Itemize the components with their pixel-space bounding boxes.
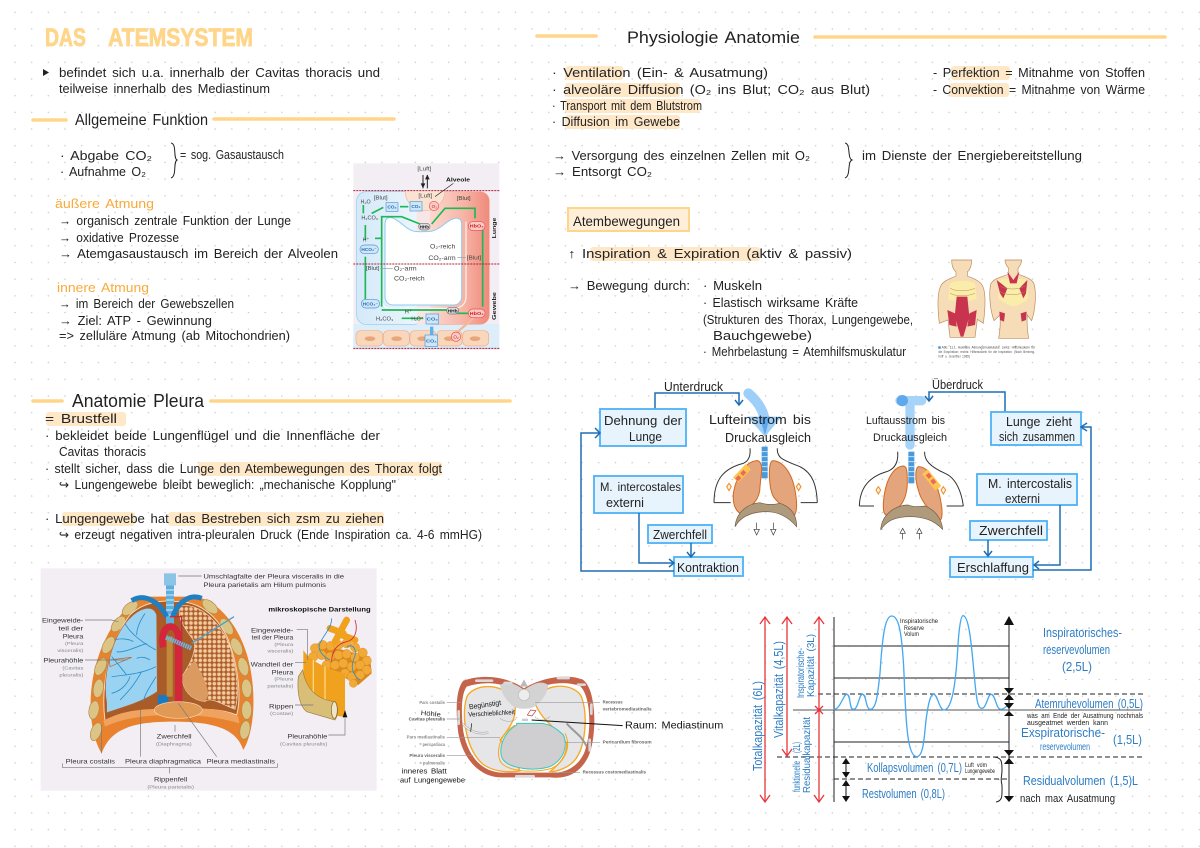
text: Luftausstrom: Luftausstrom bis: [866, 415, 945, 427]
labels: Pleura: [63, 634, 84, 641]
box: Lunge zieht sich zusammen: Lunge zieht: [1006, 415, 1073, 429]
diagram: alveolar gas exchange: HHb: [420, 224, 429, 229]
diagram: alveolar gas exchange: CO₂-reich: [394, 277, 425, 283]
labels: visceralis): [57, 648, 84, 653]
label: Exspiratorisches Reservevolumen: [1021, 726, 1142, 753]
arrows: feedback loop: [984, 423, 1091, 570]
labels: Wandteil der: [251, 662, 294, 669]
volume curve: [834, 616, 1009, 757]
labels: Pericardium fibrosum: [603, 740, 652, 745]
text block: Pleura description: [45, 412, 482, 542]
labels: inneres Blatt: [402, 766, 447, 775]
text block: Physiologie list: · alveoläre Diffusion (O₂ ins Blut; CO₂ aus Blut): [552, 83, 870, 97]
diagram: alveolar gas exchange: CO₂-arm: [428, 256, 456, 262]
box: Zwerchfell: Zwerchfell: [653, 528, 707, 542]
text block: Bewegung: Bauchgewebe): [713, 329, 812, 343]
labels: Höhle: [420, 710, 441, 719]
labels: (Costae): [270, 711, 294, 716]
text block: Pleura description: · stellt sicher, dass die Lunge den Atembewegungen des Thorax folgt: [45, 462, 443, 476]
labels: Rippen: [269, 703, 294, 710]
diagram: alveolar gas exchange: [Blut]: [457, 196, 471, 202]
labels: Begünstigt: [468, 698, 502, 711]
label: Inspiratorisches Reservevolumen: (2,5L): [1062, 660, 1092, 674]
label: Kollapsvolumen: Lungengewebe: [965, 769, 995, 775]
chart: lung volumes: [751, 616, 1145, 805]
text block: Bewegung: [568, 247, 913, 359]
labels: Rippenfell: [154, 777, 188, 784]
diagram: alveolar gas exchange: H₂CO₃: [361, 215, 378, 221]
box: Kontraktion: Kontraktion: [677, 561, 739, 575]
diagram: alveolar gas exchange: HbO₂: [470, 224, 484, 229]
label: Atemruhevolumen: Atemruhevolumen (0,5L): [1035, 697, 1143, 711]
labels: Pleura visceralis: [409, 753, 446, 758]
text block: äußere Atmung: → organisch zentrale Funktion der Lunge: [59, 214, 291, 228]
text block: Pleura description: = Brustfell: [45, 412, 117, 426]
labels: [42, 573, 371, 790]
diagram: alveolar gas exchange: CO₂: [427, 316, 438, 322]
intro text block: [43, 66, 380, 96]
labels: Cavitas pleuralis: [409, 716, 446, 721]
label: Atemruhevolumen: was am Ende der Ausatmung nochmals: [1026, 713, 1143, 720]
left lung: [105, 608, 157, 713]
labels: pleuralis): [59, 673, 84, 678]
rotated capacity labels: Vitalkapazität (4,5L): [772, 641, 786, 738]
labels: Pleura: [272, 669, 294, 676]
text block: Gasaustausch: = sog. Gasaustausch: [180, 148, 284, 162]
text block: Perfektion und Convektion: [933, 66, 1145, 97]
box: Lunge zieht sich zusammen: sich zusammen: [999, 430, 1075, 444]
labels: teil der Pleura: [252, 634, 294, 641]
labels: mikroskopische Darstellung: [268, 607, 371, 614]
black volume arrows: [842, 616, 1014, 802]
brace: [993, 757, 1002, 802]
diagram: alveolar gas exchange: CO₂: [411, 204, 421, 209]
flow diagram: inspiration: [581, 380, 817, 576]
label: Exspiratorisches Reservevolumen: (1,5L): [1113, 733, 1142, 747]
diagram: alveolar gas exchange: [Luft]: [417, 167, 432, 173]
diagram: alveolar gas exchange: H₂O: [361, 199, 371, 205]
rotated capacity labels: funktionelle - (2L): [792, 742, 803, 792]
text block: Gasaustausch: · Abgabe CO₂: [60, 149, 152, 163]
label: Inspiratorisches Reservevolumen: Inspiratorisches-: [1043, 626, 1122, 640]
diagram: alveolar gas exchange: O₂-arm: [394, 267, 417, 273]
box: Erschlaffung: Erschlaffung: [957, 560, 1029, 575]
diagram: thorax with pleura: [41, 568, 377, 791]
labels: = pulmonalis: [419, 760, 446, 765]
text block: Pleura description: ↪ Lungengewebe bleibt beweglich: „mechanische Kopplung": [59, 478, 396, 492]
text block: innere Atmung: → Ziel: ATP - Gewinnung: [59, 314, 212, 328]
text block: Gasaustausch: · Aufnahme O₂: [60, 165, 146, 179]
label: Kollapsvolumen: Kollapsvolumen (0,7L): [867, 761, 962, 775]
labels: Pleura costalis: [66, 758, 116, 765]
box: Zwerchfell: Zwerchfell: [979, 524, 1043, 538]
label: Atemruhevolumen: ausgeatmet werden kann: [1027, 720, 1108, 727]
box: Dehnung der Lunge: Lunge: [629, 430, 662, 444]
microscopic detail: [298, 618, 372, 720]
small curve label: Inspiratorische: [900, 619, 939, 625]
diagram: alveolar gas exchange: Gewebe: [492, 292, 498, 320]
box: Dehnung der Lunge: Dehnung der: [604, 414, 682, 428]
small curve label: Reserve: [904, 626, 925, 632]
highlights: [565, 66, 700, 129]
diagram: alveolar gas exchange: HCO₃⁻: [363, 301, 379, 306]
heading: Allgemeine Funktion: Allgemeine Funktion: [75, 112, 208, 129]
labels: [400, 698, 723, 785]
chart grid lines: [777, 617, 1145, 802]
diagram: alveolar gas exchange: H⁺: [363, 237, 370, 244]
rotated capacity labels: Residualkapazität: [802, 717, 813, 793]
title: ATEMSYSTEM: [108, 24, 253, 52]
labels: Pars mediastinalis: [407, 735, 446, 740]
text block: Versorgung: [553, 143, 1082, 179]
text block: innere Atmung: → im Bereich der Gewebszellen: [59, 297, 234, 311]
labels: Recessus: [603, 700, 623, 705]
title: [45, 24, 253, 52]
text block: Pleura description: · Lungengewebe hat das Bestreben sich zsm zu ziehen: [45, 512, 384, 526]
diagram: alveolar gas exchange: HCO₃⁻: [361, 247, 377, 252]
text block: Bewegung: (Strukturen des Thorax, Lungengewebe,: [703, 313, 913, 327]
text block: innere Atmung: => zelluläre Atmung (ab Mitochondrien): [59, 329, 290, 343]
text block: Bewegung: ↑ Inspiration & Expiration (aktiv & passiv): [568, 247, 852, 261]
label: Restvolumen: Restvolumen (0,8L): [862, 787, 945, 801]
box: M. intercostalis externi: M. intercostalis: [988, 477, 1072, 491]
diagram: mediastinum cross-section: [400, 677, 723, 785]
text block: äußere Atmung: → Atemgasaustausch im Bereich der Alveolen: [59, 247, 338, 261]
text block: Physiologie list: · Diffusion im Gewebe: [552, 115, 680, 129]
text: Luftausstrom: [866, 415, 947, 444]
text block: Perfektion und Convektion: - Perfektion = Mitnahme von Stoffen: [933, 66, 1145, 80]
labels: Pars costalis: [419, 700, 446, 705]
text block: äußere Atmung: äußere Atmung: [55, 196, 154, 211]
box: Kontraktion: [674, 557, 743, 576]
box: Erschlaffung: [950, 557, 1033, 577]
labels: (Pleura: [274, 642, 294, 647]
box: Lunge zieht sich zusammen: [991, 412, 1081, 445]
label: Exspiratorisches Reservevolumen: reservevolumen: [1040, 742, 1090, 753]
labels: (Pleura parietalis): [147, 785, 195, 790]
arrow: Überdruck: Überdruck: [932, 378, 984, 392]
diagram: alveolar gas exchange: Alveole: [446, 178, 470, 184]
label: Kollapsvolumen: Luft vom: [965, 763, 987, 769]
labels: vertebromediastinalis: [603, 706, 652, 711]
labels: Eingeweide-: [42, 618, 83, 625]
labels: (Pleura: [274, 677, 294, 682]
intro text block: teilweise innerhalb des Mediastinum: [59, 82, 270, 96]
label: Residualvolumen: nach max Ausatmung: [1020, 793, 1115, 805]
small curve label: Volum: [904, 632, 919, 638]
diagram: alveolar gas exchange: H₂O⁺: [411, 315, 424, 322]
labels: parietalis): [267, 684, 294, 689]
labels: teil der: [58, 626, 84, 633]
text: Lufteinstrom: Druckausgleich: [725, 431, 811, 445]
heading box: Atembewegungen: [568, 208, 689, 231]
label: Residualvolumen: Residualvolumen (1,5)L: [1023, 774, 1138, 788]
diagram: alveolar gas exchange: [Luft]: [418, 193, 433, 199]
label: Residualvolumen: [1020, 774, 1138, 805]
diagram: alveolar gas exchange: H⁺: [405, 308, 412, 315]
diagram: alveolar gas exchange: H₂CO₃: [376, 316, 393, 322]
text block: Physiologie list: · Transport mit dem Blutstrom: [552, 99, 702, 113]
labels: = pericardiaca: [419, 742, 446, 747]
labels: (Diaphragma): [156, 742, 192, 747]
heading box: Atembewegungen: Atembewegungen: [573, 213, 680, 229]
text: Lufteinstrom: [709, 413, 811, 445]
diagram: alveolar gas exchange: [Blut]: [374, 196, 388, 202]
text block: Perfektion und Convektion: - Convektion = Mitnahme von Wärme: [933, 83, 1145, 97]
labels: Zwerchfell: [157, 733, 192, 740]
arrow: Unterdruck: Unterdruck: [664, 380, 724, 394]
labels: Raum: Mediastinum: [625, 721, 723, 732]
diagram: alveolar gas exchange: O₂-reich: [430, 245, 455, 251]
box: M. intercostalis externi: [977, 474, 1077, 506]
labels: Pleura diaphragmatica: [125, 758, 201, 765]
small curve label: [900, 619, 939, 638]
right lung: [179, 605, 237, 709]
text block: innere Atmung: [57, 280, 290, 343]
text block: Physiologie list: · Ventilation (Ein- & Ausatmung): [552, 66, 768, 80]
arrow: Unterdruck: [655, 380, 743, 409]
labels: Pleura mediastinalis: [207, 758, 276, 765]
box: Zwerchfell: [970, 521, 1047, 540]
labels: Umschlagfalte der Pleura visceralis in die: [203, 573, 344, 580]
text block: äußere Atmung: [55, 196, 338, 261]
label: Inspiratorisches Reservevolumen: reservevolumen: [1043, 643, 1110, 657]
diagram: alveolar gas exchange: [Blut]: [366, 266, 380, 272]
text block: Pleura description: ↪ erzeugt negativen intra-pleuralen Druck (Ende Inspiration ca. 4-6 mmHG): [59, 528, 482, 542]
chest wall: [91, 597, 253, 753]
diagram: alveolar gas exchange: CO₂: [426, 339, 437, 345]
box: M. intercostalis externi: externi: [1005, 492, 1040, 506]
diagram: alveolar gas exchange: O₂: [432, 204, 437, 209]
text block: innere Atmung: innere Atmung: [57, 280, 149, 295]
title: DAS: [45, 24, 86, 52]
airway and vessels: [164, 573, 176, 585]
text block: Gasaustausch: [60, 143, 284, 179]
text: Luftausstrom: Druckausgleich: [873, 432, 947, 444]
label: Exspiratorisches Reservevolumen: Exspiratorische-: [1021, 726, 1105, 740]
caption: [938, 346, 1036, 359]
text: Lufteinstrom: Lufteinstrom bis: [709, 413, 811, 427]
text block: Versorgung: → Versorgung des einzelnen Zellen mit O₂: [553, 149, 810, 163]
illustration: auxiliary respiratory muscles: [938, 260, 1036, 359]
labels: Pleurahöhle: [287, 733, 328, 740]
text block: Versorgung: im Dienste der Energiebereitstellung: [862, 149, 1082, 163]
text block: Bewegung: · Mehrbelastung = Atemhilfsmuskulatur: [703, 345, 906, 359]
diagram: alveolar gas exchange: CO₂: [387, 205, 397, 210]
diagram: alveolar gas exchange: Lunge: [492, 218, 498, 238]
text block: äußere Atmung: → oxidative Prozesse: [59, 231, 179, 245]
labels: (Pleura: [65, 641, 84, 646]
labels: Eingeweide-: [251, 628, 293, 635]
text block: Bewegung: · Elastisch wirksame Kräfte: [703, 296, 858, 310]
arrows: feedback loop: [581, 428, 695, 571]
box: M. intercostales externi: M. intercostales: [600, 482, 681, 494]
rotated capacity labels: Totalkapazität (6L): [751, 681, 765, 771]
caption: die Exspiration; rechts: Hilfsmuskeln für die Inspiration. (Nach Benning-: [938, 350, 1035, 354]
label: Atemruhevolumen: [1026, 697, 1143, 727]
text block: Versorgung: → Entsorgt CO₂: [553, 165, 652, 179]
rotated capacity labels: Kapazität (3L): [806, 634, 817, 697]
box: M. intercostales externi: externi: [606, 496, 644, 510]
arrow: Überdruck: [925, 378, 1005, 412]
labels: Recessus costomediastinalis: [583, 770, 647, 775]
box: Dehnung der Lunge: [600, 409, 686, 446]
labels: Verschieblichkeit: [468, 709, 515, 719]
caption: hoff u. Goerttler 1985): [938, 355, 970, 359]
text block: Pleura description: Cavitas thoracis: [59, 445, 146, 459]
diagram: alveolar gas exchange: HbO₂: [470, 311, 484, 316]
heading: Physiologie Anatomie: Physiologie Anatomie: [627, 28, 800, 47]
icon: lungs inspiration: [714, 393, 817, 535]
intro text block: befindet sich u.a. innerhalb der Cavitas thoracis und: [59, 66, 380, 80]
labels: Pleurahöhle: [43, 658, 84, 665]
flow diagram: expiration: [859, 378, 1091, 577]
red capacity arrows: [760, 617, 824, 802]
heading: Anatomie Pleura: Anatomie Pleura: [72, 391, 205, 411]
rotated capacity labels: [751, 634, 817, 793]
diagram: alveolar gas exchange: [Blut]: [467, 255, 482, 261]
icon: lungs expiration: [859, 395, 963, 539]
label: Inspiratorisches Reservevolumen: [1043, 626, 1122, 674]
labels: Pleura parietalis am Hilum pulmonis: [203, 582, 327, 589]
highlights: [46, 412, 442, 526]
box: M. intercostales externi: [594, 476, 683, 513]
caption: Abb. 11.1. Auxiliäre Atmungsmuskulatur. Links: Hilfsmuskeln für: [942, 346, 1036, 350]
rotated capacity labels: Inspiratorische-: [796, 648, 807, 698]
text block: Bewegung: → Bewegung durch:: [568, 279, 690, 293]
text block: Physiologie list: [552, 66, 870, 129]
labels: auf Lungengewebe: [400, 776, 465, 785]
labels: (Cavitas: [62, 665, 84, 670]
diagram: alveolar gas exchange: O₂: [453, 335, 459, 340]
diagram: alveolar gas exchange: [353, 163, 499, 350]
text block: Bewegung: · Muskeln: [703, 279, 762, 293]
labels: visceralis): [267, 649, 294, 654]
labels: (Cavitas pleuralis): [280, 742, 328, 747]
diagram: alveolar gas exchange: HHb: [448, 308, 458, 313]
box: Zwerchfell: [648, 525, 712, 543]
text block: Pleura description: · bekleidet beide Lungenflügel und die Innenfläche der: [45, 429, 380, 443]
